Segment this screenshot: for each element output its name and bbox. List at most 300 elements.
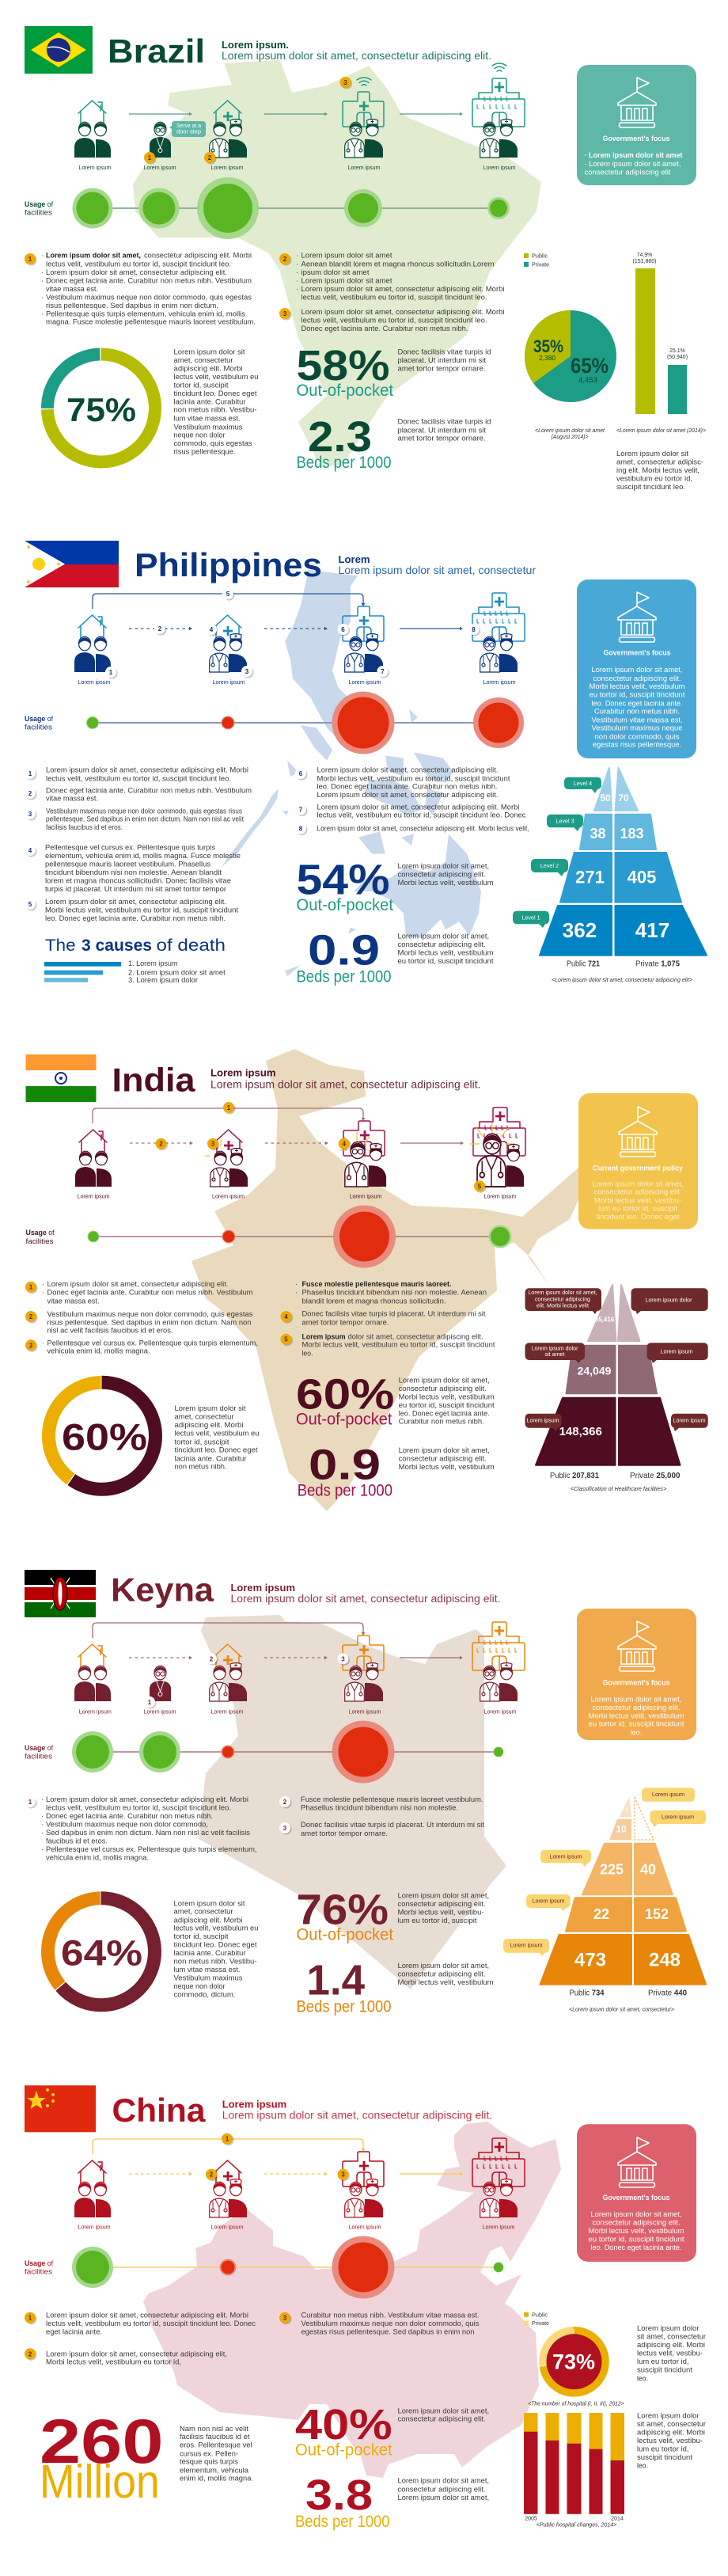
text block: out-of-pocket: leo. Donec eget lacinia ante. (399, 1409, 490, 1417)
text block: notes 1 to 5: 2 (28, 790, 32, 797)
usage of facilities chart: Usage of (25, 2259, 53, 2268)
text block: notes 1 to 5: Vestibulum maximus neque non dolor commodo, quis egestas risus (46, 807, 243, 815)
text block: notes 1 and 2: 1 (28, 2315, 32, 2322)
pyramid caption: <Classification of Healthcare facilities> (571, 1487, 666, 1492)
text block: notes 4 and 5: Lorem ipsum (302, 1332, 346, 1340)
text block: notes 2 and 3: Lorem ipsum dolor sit amet, consectetur adipiscing elit. Morbi (301, 308, 505, 316)
callouts: pyramid (503, 1788, 706, 1956)
text block: out-of-pocket: Lorem ipsum dolor sit amet, (397, 1892, 489, 1900)
text block: chart note: ing elit. Morbi lectus velit, (616, 466, 700, 474)
numbered markers: 3 (341, 1655, 345, 1662)
text block: notes 1 to 5: turpis id placerat. Ut interdum mi sit amet tortor tempor (45, 885, 226, 893)
stat: out-of-pocket 76%: Out-of-pocket (296, 1926, 393, 1944)
bar chart: 25.1% (669, 348, 685, 354)
panel: government focus: egestas risus pellentesque. (593, 741, 681, 749)
panel: government focus: Lorem ipsum dolor sit amet, (590, 2210, 682, 2218)
text block: 260 million: enim id, mollis magna. (180, 2475, 253, 2483)
stat: 260 million: Million (40, 2456, 160, 2508)
text block: notes 4 and 5: leo. (302, 1349, 313, 1357)
panel: government focus: non dolor commodo, quis (595, 732, 680, 740)
numbered markers: 1 (109, 669, 113, 676)
text block: notes 1 and 2: Lorem ipsum dolor sit amet, consectetur adipiscing elit. Morbi (46, 2311, 248, 2319)
icon labels: Lorem ipsum (210, 1708, 244, 1715)
text block: out-of-pocket: Morbi lectus velit, vestibulum (397, 879, 494, 887)
text block: beds: placerat. Ut interdum mi sit (397, 426, 487, 434)
icon labels: Lorem ipsum (210, 164, 244, 171)
icon: family at home (74, 615, 111, 672)
text block: 260 million: tesque quis turpis (180, 2458, 239, 2466)
text block: notes 1 to 3: Pellentesque vel cursus ex. Pellentesque quis turpis elementum, (47, 1339, 258, 1347)
icon: family at home (75, 1130, 112, 1187)
text block: donut description: tortor id, suscipit (174, 381, 229, 389)
text block: notes 6 to 8: 6 (299, 770, 303, 777)
icon: clinic (210, 101, 247, 158)
flag: Kenya (25, 1570, 96, 1617)
numbered markers: 2 (158, 625, 162, 633)
callouts: pyramid: Lorem ipsum dolor sit amet, (529, 1289, 597, 1296)
callout: door step: Serve at a (176, 123, 201, 129)
title: China: China (112, 2092, 206, 2129)
text block: out-of-pocket: Lorem ipsum dolor sit amet, (397, 2407, 489, 2415)
stat: beds 0.9: Beds per 1000 (296, 968, 391, 986)
panel: government focus: Morbi lectus velit, vestibulum (589, 1712, 684, 1719)
text block: out-of-pocket (397, 348, 491, 373)
pyramid chart: facility levels: 22 (593, 1906, 609, 1922)
text block: note 1: · (41, 1845, 44, 1853)
panel: government focus: Vestibulum vitae massa est. (592, 716, 682, 724)
text block: notes 2 and 3: Fusce molestie pellentesque mauris laoreet vestibulum. (301, 1795, 483, 1803)
pyramid chart: facility levels: 38 (590, 826, 606, 842)
text block: notes 1 to 3: vehicula enim id, mollis magna. (47, 1347, 150, 1355)
subtitle: Kenya: Lorem ipsum (231, 1582, 295, 1594)
stat: out-of-pocket 76%: 76% (296, 1886, 389, 1933)
text block: bar description: suscipit tincidunt (637, 2453, 693, 2461)
text block: beds: eu tortor id, suscipit tincidunt (397, 957, 494, 965)
text block: note 1: vehicula enim id, mollis magna. (46, 1853, 149, 1861)
text block: notes 1 to 5: pellentesque. Sed dapibus in enim non dictum. Nam non nisl ac velit (46, 815, 245, 823)
text block: chart note: vestibulum eu tortor id, (616, 474, 692, 482)
bar chart: (151,860) (633, 259, 656, 264)
panel: government focus: Morbi lectus velit, vestibulum (589, 2227, 684, 2235)
donut chart: 75%: 75% (66, 391, 136, 428)
level tags: Level 4 (574, 780, 592, 787)
text block: note 3: 3 (283, 2315, 287, 2322)
numbered markers: 5 (226, 591, 230, 598)
text block: notes 1 to 5: pellentesque mauris laoreet vestibulum. Phasellus (45, 861, 211, 868)
text block: note 3: Vestibulum maximus neque non dolor commodo, quis (301, 2320, 480, 2327)
text block: chart note: amet, consectetur adipisc- (616, 458, 703, 466)
text block: notes 4 and 5: 4 (284, 1313, 288, 1320)
text block: notes 1 to 5: 3 (28, 811, 32, 818)
text block: 260 million: Nam non nisl ac velit (180, 2425, 249, 2433)
pyramid totals: Private 1,075 (635, 960, 680, 969)
pyramid chart: facility levels (540, 768, 707, 956)
callouts: pyramid (525, 1288, 708, 1431)
text block: notes 6 to 8: Morbi lectus velit, vestibulum eu tortor id, suscipit tincidunt (317, 774, 510, 782)
panel: China (25, 2085, 706, 2531)
text block: notes 1 to 3: · (42, 1289, 44, 1297)
panel: current government policy: Current government policy (593, 1165, 683, 1172)
numbered markers: 4 (210, 626, 214, 633)
text block: ring description: Lorem ipsum dolor (637, 2324, 700, 2332)
panel: government focus: Lorem ipsum dolor sit amet, (590, 1695, 682, 1703)
text block: notes 2 and 3 (279, 252, 505, 332)
numbered markers: 2 (159, 1141, 163, 1148)
pie chart: 2,380 (539, 355, 556, 362)
pyramid chart: healthcare facilities (536, 1285, 681, 1465)
pyramid chart: facility levels: 417 (635, 918, 669, 942)
stat: out-of-pocket 40%: Out-of-pocket (295, 2441, 392, 2460)
panel: government focus: leo. Donec eget lacinia ante. (590, 2244, 682, 2251)
callouts: pyramid: elit. Morbi lectus velit (537, 1302, 589, 1309)
text block: notes 1 to 5: Pellentesque vel cursus ex. Pellentesque quis turpis (45, 844, 216, 852)
text block: donut description: Vestibulum maximus (174, 423, 243, 431)
map: China (143, 2122, 561, 2478)
bar chart: 74.9% (637, 253, 652, 258)
ring chart: 73%: 73% (552, 2350, 595, 2374)
panel: current government policy: tincidunt leo. Donec eget (597, 1213, 680, 1221)
pyramid chart: facility levels: 225 (600, 1862, 624, 1878)
heading: 3 causes of death: 3 causes (82, 937, 152, 955)
map: Kenya (199, 1615, 506, 1989)
icon labels: Lorem ipsum (210, 2223, 244, 2230)
numbered markers: 1 (227, 1104, 231, 1111)
panel: government focus: eu tortor id, suscipit tincidunt (589, 2235, 684, 2243)
text block: note 1: lectus velit, vestibulum eu tortor id, suscipit tincidunt leo. (46, 260, 231, 268)
pie chart: 4,453 (578, 376, 597, 384)
title: Kenya: Keyna (111, 1571, 214, 1609)
panel: current government policy: lum eu tortor id, suscipit (598, 1205, 678, 1213)
pyramid caption: <Lorem ipsum dolor sit amet, consectetur adipiscing elit> (552, 978, 692, 983)
text block: donut description: amet, consectetur (174, 1412, 234, 1420)
text block: out-of-pocket: Lorem ipsum dolor sit amet, (397, 862, 489, 870)
map: India (191, 1049, 584, 1511)
panel: government focus (577, 1609, 696, 1740)
text block: notes 1 to 3: · (42, 1339, 44, 1347)
title: India: India (112, 1061, 195, 1098)
panel: Kenya (25, 1570, 706, 2016)
text block: notes 2 and 3: Lorem ipsum dolor sit amet, consectetur adipiscing elit. Morbi (301, 285, 505, 293)
numbered markers: 2 (210, 2171, 214, 2179)
text block: chart note (616, 450, 703, 491)
callouts: pyramid: Lorem ipsum (673, 1417, 706, 1424)
text block: beds: Lorem ipsum dolor sit amet, (397, 2477, 489, 2485)
numbered markers: 4 (342, 1141, 346, 1148)
pyramid chart: facility levels: 473 (574, 1949, 606, 1970)
text block: donut description: Vestibulum maximus (174, 1974, 243, 1982)
pyramid chart: facility levels: 152 (645, 1906, 669, 1922)
text block: notes 6 to 8: Lorem ipsum dolor sit amet, consectetur adipiscing elit. Morbi (317, 803, 520, 811)
text block: out-of-pocket: consectetur adipiscing elit. (399, 1385, 487, 1392)
text block: note 1: consectetur adipiscing elit. Morbi (144, 252, 252, 260)
text block: note 1: · (41, 1812, 44, 1820)
bar list: causes of death: 1. Lorem ipsum (128, 959, 177, 967)
text block: notes 6 to 8: 8 (299, 826, 303, 833)
text block: notes 1 to 3: 1 (29, 1284, 33, 1291)
text block: ring description: adipiscing elit. Morbi (637, 2341, 705, 2349)
text block: note 1: 1 (28, 256, 32, 263)
text block: beds (397, 932, 494, 965)
panel: government focus: Morbi lectus velit, vestibulum (589, 682, 685, 690)
text block: note 1: faucibus id et eros. (46, 1837, 108, 1845)
subtitle: India: Lorem ipsum (210, 1066, 276, 1078)
text block: notes 2 and 3: Donec facilisis vitae turpis id placerat. Ut interdum mi sit (301, 1821, 485, 1829)
text block: out-of-pocket: placerat. Ut interdum mi sit (397, 356, 487, 364)
icon labels: Lorem ipsum (484, 1193, 517, 1200)
subtitle: Brazil (222, 39, 491, 62)
stacked bar chart: public hospital changes (524, 2413, 624, 2521)
stat: beds 0.9 (296, 927, 391, 986)
numbered markers: 8 (472, 626, 476, 633)
usage of facilities chart (25, 692, 524, 754)
text block: notes 6 to 8: Lorem ipsum dolor sit amet, consectetur adipiscing elit. (317, 791, 499, 799)
text block: notes 1 to 3: Vestibulum maximus neque non dolor commodo, quis egestas (47, 1310, 253, 1318)
icon labels: Lorem ipsum (350, 1193, 382, 1200)
text block: 260 million: facilisis faucibus id et (180, 2433, 250, 2441)
text block: notes 1 to 3: · (42, 1280, 44, 1288)
text block: note 1: Vestibulum maximus neque non dolor commodo, (46, 1820, 208, 1828)
text block: donut description: non metus nibh. (174, 1463, 226, 1471)
icon labels (78, 1193, 517, 1200)
chart captions: <Lorem ipsum dolor sit amet (2014)> (616, 428, 706, 434)
text block: out-of-pocket: lum eu tortor id, suscipit (397, 1917, 477, 1924)
numbered markers: 1 (226, 2136, 229, 2143)
text block: ring description (637, 2324, 706, 2382)
panel: government focus: consectetur adipiscing elit. (592, 1704, 681, 1712)
text block: note 1: · (41, 293, 44, 301)
text block: note 1: lectus velit, vestibulum eu tortor id, suscipit tincidunt leo. (46, 1804, 231, 1812)
connector arrow (93, 2139, 366, 2154)
text block: beds: consectetur adipiscing elit. (397, 940, 486, 948)
map: Brazil (133, 60, 541, 467)
icon labels: Lorem ipsum (78, 2223, 111, 2230)
stat: beds 0.9: 0.9 (309, 1442, 381, 1489)
text block: notes 2 and 3: · (296, 260, 298, 268)
text block: bar description: Lorem ipsum dolor (637, 2412, 700, 2420)
subtitle: Philippines (339, 553, 536, 576)
text block: notes 4 and 5: Phasellus tincidunt bibendum nisi non molestie. Aenean (302, 1289, 487, 1297)
text block: notes 2 and 3: 3 (283, 310, 287, 317)
text block: beds: Lorem ipsum dolor sit amet, (399, 1446, 490, 1454)
text block: notes 1 to 5: Donec eget lacinia ante. Curabitur non metus nibh. Vestibulum (46, 786, 252, 794)
usage of facilities chart (25, 177, 510, 239)
text block: beds (397, 1962, 494, 1986)
text block: notes 6 to 8: lectus velit, vestibulum eu tortor id, suscipit tincidunt leo. Donec (317, 811, 526, 819)
subtitle: Brazil: Lorem ipsum dolor sit amet, consectetur adipiscing elit. (222, 49, 491, 62)
icon: clinic (210, 2160, 247, 2217)
panel: government focus (577, 579, 696, 758)
callouts: pyramid: sit amet (544, 1351, 565, 1358)
pyramid chart: facility levels: 271 (575, 868, 605, 887)
text block: chart note: suscipit tincidunt leo. (616, 483, 685, 491)
level tags (513, 777, 601, 928)
text block: notes 2 and 3: · (296, 276, 298, 284)
pyramid totals (550, 1472, 681, 1480)
chart captions: <Lorem ipsum dolor sit amet (535, 428, 605, 434)
bar list: causes of death (44, 959, 226, 984)
stat: beds 2.3: Beds per 1000 (296, 454, 391, 472)
icon labels: Lorem ipsum (348, 164, 381, 171)
usage of facilities chart: facilities (25, 2267, 52, 2277)
text block: donut description (174, 1404, 260, 1471)
text block: notes 1 and 2: Lorem ipsum dolor sit amet, consectetur adipiscing elit, (46, 2350, 227, 2358)
ring caption: <The number of hospital (I, II, III), 2012> (528, 2402, 624, 2407)
panel: government focus: Government's focus (603, 2194, 669, 2202)
text block: notes 4 and 5: dolor sit amet, consectetur adipiscing elit. (348, 1332, 483, 1340)
text block: notes 2 and 3: amet tortor tempor ornare. (301, 1829, 388, 1837)
text block: out-of-pocket: Morbi lectus velit, vestibulum (399, 1392, 495, 1400)
numbered markers (144, 77, 352, 165)
stat: beds 1.4: Beds per 1000 (296, 1998, 391, 2016)
text block: out-of-pocket (397, 1892, 489, 1924)
text block: beds: Lorem ipsum dolor sit amet, (397, 1962, 489, 1970)
text block: note 1 (25, 252, 256, 326)
icon labels: Lorem ipsum (212, 678, 245, 686)
text block: donut description: Lorem ipsum dolor sit (174, 1404, 246, 1412)
text block: notes 1 to 3: Lorem ipsum dolor sit amet, consectetur adipiscing elit. (47, 1280, 228, 1288)
text block: donut description: tortor id, suscipit (174, 1438, 229, 1446)
text block: donut description: tincidunt leo. Donec eget (174, 1446, 258, 1453)
icon labels: Lorem ipsum (78, 1193, 110, 1200)
text block: out-of-pocket (397, 862, 494, 887)
stat: beds 2.3 (296, 413, 391, 472)
usage of facilities chart: Usage of (25, 1744, 53, 1753)
text block: notes 1 to 3 (25, 1280, 258, 1355)
pie chart (525, 310, 616, 402)
pyramid chart: facility levels (540, 1797, 706, 1985)
connector arrow (93, 1623, 366, 1638)
text block: note 1: · (41, 276, 44, 284)
arrows (129, 2172, 463, 2175)
icon: family at home (74, 2160, 111, 2217)
text block: donut description: neque non dolor (174, 1982, 226, 1990)
title: Brazil: Brazil (108, 32, 205, 70)
text block: note 1: · (41, 268, 44, 276)
pyramid totals (567, 960, 680, 969)
text block: notes 1 to 5: elementum, vehicula enim id, mollis magna. Fusce molestie (45, 852, 241, 860)
pyramid totals: Public 734 (570, 1989, 605, 1998)
icon: hospital with senior doctor (339, 1121, 386, 1187)
stat: out-of-pocket 60%: Out-of-pocket (296, 1410, 392, 1428)
icon: clinic with rays (205, 1130, 248, 1187)
text block: donut description: lacinia ante. Curabitur (174, 1949, 246, 1957)
text block: donut description: adipiscing elit. Morbi (174, 365, 243, 373)
text block: notes 4 and 5: · (295, 1289, 298, 1297)
icon: hospital (343, 78, 384, 158)
text block: beds: Morbi lectus velit, vestibulum (399, 1463, 495, 1471)
text block: note 1: vitae massa est. (46, 285, 98, 293)
panel: government focus: Lorem ipsum dolor sit amet, (592, 666, 682, 674)
panel: government focus: Government's focus (603, 135, 669, 142)
flag: Brazil (25, 26, 93, 74)
numbered markers (206, 2133, 350, 2181)
icon labels: Lorem ipsum (483, 2223, 515, 2230)
callouts: pyramid: Lorem ipsum (532, 1898, 565, 1905)
arrows (129, 1656, 463, 1659)
numbered markers (155, 1102, 486, 1193)
text block: note 1: magna. Fusce molestie pellentesque mauris laoreet vestibulum. (46, 318, 256, 326)
icon labels: Lorem ipsum (483, 164, 516, 171)
usage of facilities chart: facilities (25, 724, 52, 731)
text block: note 1: Lorem ipsum dolor sit amet, consectetur adipiscing elit. (46, 268, 227, 276)
text block: notes 2 and 3: 2 (283, 256, 287, 263)
callouts: pyramid: consectetur adipiscing (535, 1295, 590, 1302)
care pathway icons: India (75, 1102, 525, 1200)
text block: donut description: lum vitae massa est. (174, 1966, 241, 1974)
subtitle: China: Lorem ipsum (222, 2099, 286, 2111)
subtitle: Kenya (231, 1582, 500, 1605)
icon: large hospital (472, 63, 525, 158)
icon labels: Lorem ipsum (348, 1708, 381, 1715)
icon labels: Lorem ipsum (348, 678, 381, 686)
heading: 3 causes of death: of death (157, 937, 226, 955)
text block: chart note: Lorem ipsum dolor sit (616, 450, 689, 458)
stat: out-of-pocket 54%: Out-of-pocket (296, 896, 393, 914)
care pathway icons: Brazil (74, 63, 525, 171)
panel: government focus: · Lorem ipsum dolor sit amet, (584, 160, 681, 168)
stat: beds 3.8: 3.8 (305, 2472, 373, 2519)
bar chart: (50,940) (667, 355, 688, 360)
subtitle: India (210, 1066, 481, 1090)
text block: ring description: lectus velit, vestibu- (637, 2349, 703, 2357)
text block: note 1: Lorem ipsum dolor sit amet, (46, 252, 141, 260)
panel: government focus: Curabitur non metus nibh. (594, 708, 680, 716)
text block: notes 1 to 5: Lorem ipsum dolor sit amet, consectetur adipiscing elit. Morbi (46, 766, 248, 774)
text block: note 1: · (41, 252, 44, 260)
numbered markers: 2 (208, 154, 212, 161)
text block: notes 1 to 5: leo. Donec eget lacinia ante. Curabitur non metus nibh. (45, 914, 226, 922)
panel: government focus: Government's focus (603, 1678, 669, 1686)
numbered markers: 3 (245, 668, 249, 675)
connector arrow (93, 594, 366, 609)
icon labels (79, 1708, 517, 1715)
bar list: causes of death: 2. Lorem ipsum dolor sit amet (128, 968, 226, 976)
text block: out-of-pocket (399, 1376, 495, 1426)
text block: note 1: · (41, 1820, 44, 1828)
subtitle: Kenya: Lorem ipsum dolor sit amet, consectetur adipiscing elit. (231, 1592, 500, 1605)
panel: current government policy: Morbi lectus velit, vestibu- (594, 1197, 681, 1205)
panel: government focus: Government's focus (603, 649, 671, 657)
flag: India (25, 1054, 97, 1102)
text block: notes 2 and 3: Lorem ipsum dolor sit amet (301, 276, 392, 284)
text block: bar description: sit amet, consectetur (637, 2420, 706, 2428)
subtitle: China: Lorem ipsum dolor sit amet, consectetur adipiscing elit. (222, 2109, 492, 2122)
legend: Public (532, 252, 548, 260)
usage of facilities chart: facilities (25, 1237, 54, 1246)
text block: notes 2 and 3: · (296, 252, 298, 260)
text block: out-of-pocket: consectetur adipiscing elit. (397, 1900, 486, 1908)
text block: bar description: lum eu tortor id, (637, 2445, 688, 2453)
text block: bar description (637, 2412, 706, 2469)
callouts: pyramid: Lorem ipsum (662, 1813, 694, 1820)
text block: bar description: lectus velit, vestibu- (637, 2437, 703, 2445)
callouts: pyramid: Lorem ipsum (549, 1852, 582, 1860)
level tags: Level 2 (540, 862, 559, 869)
pyramid chart: facility levels: 183 (620, 826, 644, 842)
text block: donut description (174, 1899, 259, 1998)
text block: notes 6 to 8: leo. Donec eget lacinia ante. Curabitur non metus nibh. (317, 783, 497, 791)
text block: donut description: tincidunt leo. Donec eget (174, 389, 257, 397)
pyramid chart: facility levels: 40 (640, 1862, 656, 1878)
bar list: causes of death: 3. Lorem ipsum dolor (128, 976, 198, 984)
stat: beds 1.4: 1.4 (307, 1956, 365, 2004)
text block: notes 1 to 5: Morbi lectus velit, vestibulum eu tortor id, suscipit tincidunt (45, 906, 239, 914)
text block: note 3: egestas risus pellentesque. Sed dapibus in enim non (301, 2327, 475, 2335)
icon: large hospital (472, 593, 525, 672)
legend (524, 2311, 549, 2327)
callouts: pyramid: Lorem ipsum (510, 1942, 543, 1949)
text block: notes 1 to 3: risus pellentesque. Sed dapibus in enim non dictum. Nam non (47, 1318, 252, 1326)
